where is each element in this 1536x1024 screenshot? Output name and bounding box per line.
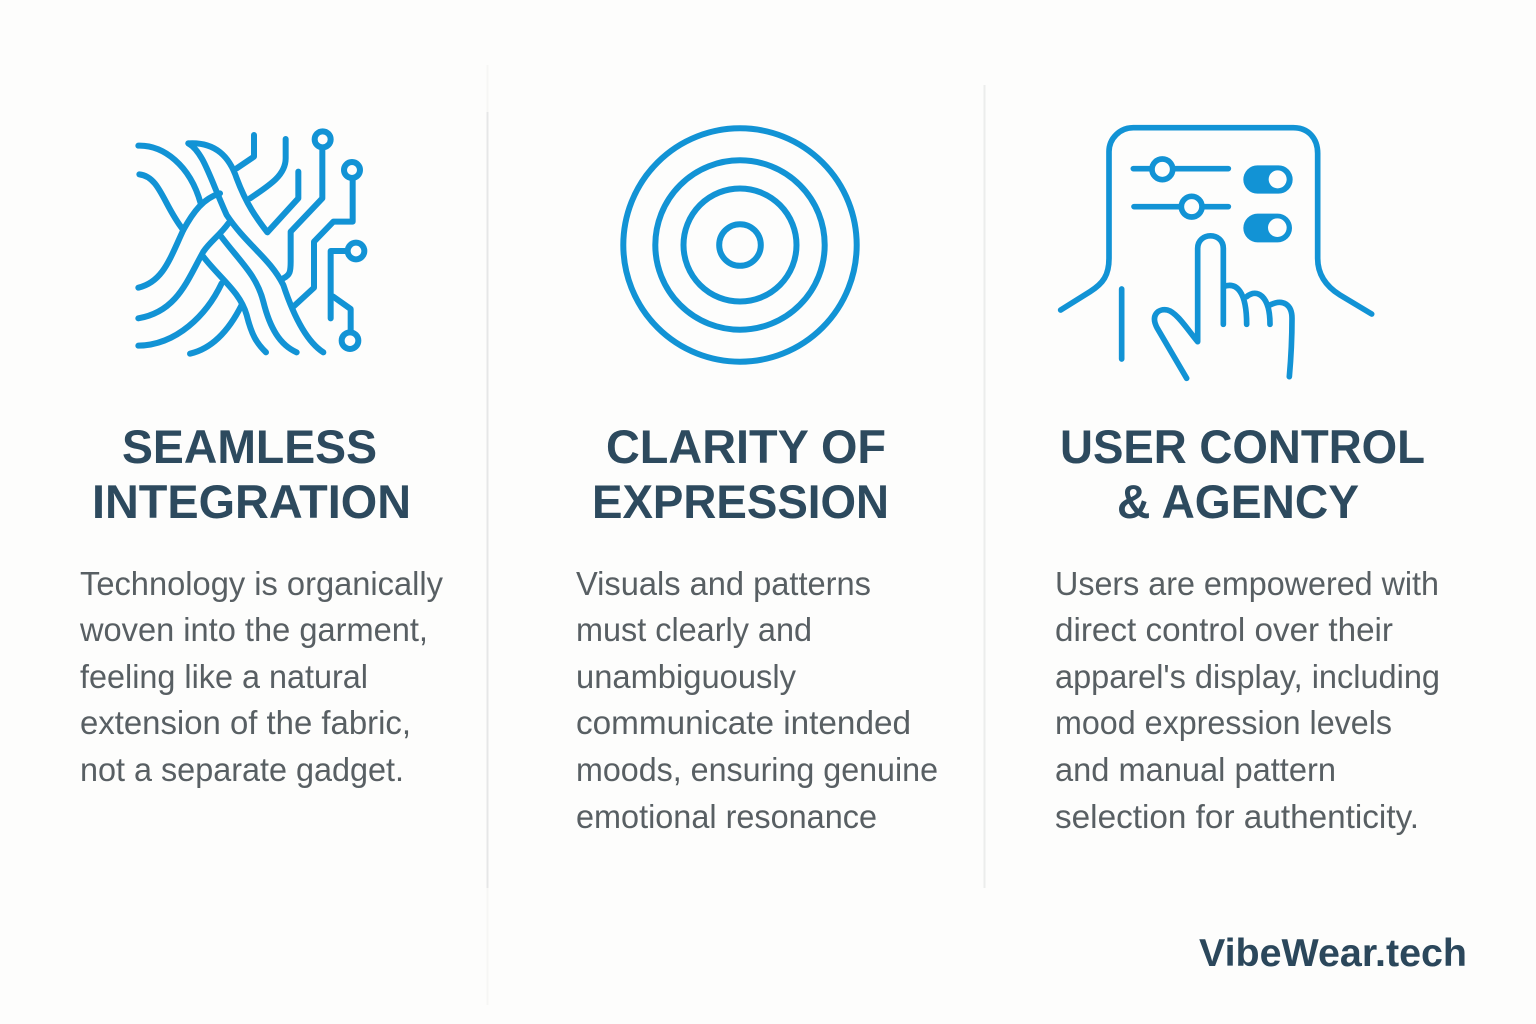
text block: user control description: direct control over their bbox=[1055, 611, 1393, 648]
heading: clarity of expression bbox=[592, 420, 889, 528]
text block: clarity of expression description: unambiguously bbox=[576, 658, 796, 695]
heading: clarity of expression: EXPRESSION bbox=[592, 475, 889, 528]
heading: clarity of expression: CLARITY OF bbox=[606, 420, 886, 473]
text block: seamless integration description: woven into the garment, bbox=[79, 611, 428, 648]
text block: user control description: apparel's display, including bbox=[1055, 658, 1440, 695]
text block: seamless integration description bbox=[79, 565, 443, 788]
panel: seamless integration bbox=[79, 131, 443, 788]
panel: clarity of expression bbox=[576, 128, 938, 835]
text block: clarity of expression description: communicate intended bbox=[576, 704, 911, 741]
icon: garment controls with pointing hand bbox=[1061, 128, 1372, 378]
text block: clarity of expression description bbox=[576, 565, 938, 835]
text block: seamless integration description: Technology is organically bbox=[80, 565, 443, 602]
text block: user control description: mood expression levels bbox=[1055, 704, 1392, 741]
text block: user control description: Users are empowered with bbox=[1055, 565, 1439, 602]
icon: concentric circles bbox=[623, 128, 857, 362]
heading: seamless integration: INTEGRATION bbox=[92, 475, 411, 528]
text block: clarity of expression description: moods, ensuring genuine bbox=[576, 751, 938, 788]
heading: seamless integration: SEAMLESS bbox=[122, 420, 377, 473]
text block: seamless integration description: not a separate gadget. bbox=[80, 751, 404, 788]
heading: user control and agency bbox=[1060, 420, 1425, 528]
text block: user control description: selection for authenticity. bbox=[1055, 798, 1419, 835]
text block: clarity of expression description: Visuals and patterns bbox=[576, 565, 871, 602]
icon: woven fabric and circuit traces bbox=[138, 131, 364, 354]
text block: seamless integration description: extension of the fabric, bbox=[80, 704, 411, 741]
text block: user control description: and manual pattern bbox=[1055, 751, 1336, 788]
text block: clarity of expression description: emotional resonance bbox=[576, 798, 877, 835]
text block: user control description bbox=[1055, 565, 1440, 835]
heading: user control and agency: & AGENCY bbox=[1117, 475, 1359, 528]
text block: clarity of expression description: must clearly and bbox=[576, 611, 812, 648]
heading: user control and agency: USER CONTROL bbox=[1060, 420, 1425, 473]
heading: seamless integration bbox=[92, 420, 411, 528]
text block: seamless integration description: feeling like a natural bbox=[80, 658, 368, 695]
brand wordmark: VibeWear.tech bbox=[1199, 932, 1467, 975]
panel: user control and agency bbox=[1055, 128, 1440, 835]
